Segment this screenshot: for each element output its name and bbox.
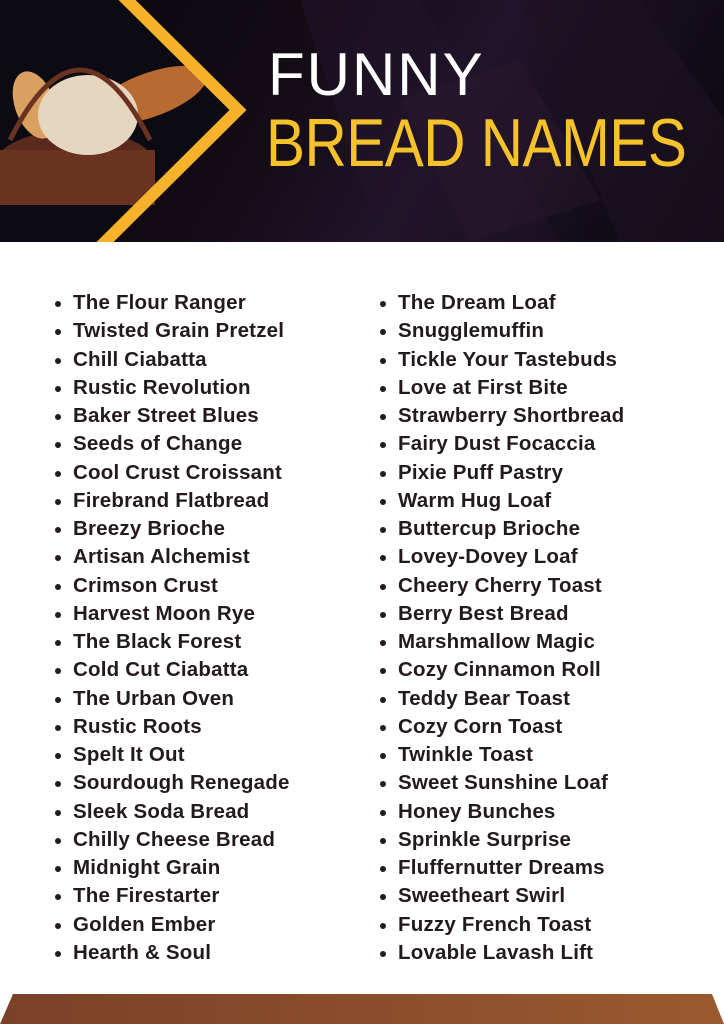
list: right column	[380, 291, 624, 964]
list: right column: Sweet Sunshine Loaf	[398, 771, 608, 794]
list: right column: Cozy Corn Toast	[398, 715, 562, 738]
list: right column: Cozy Cinnamon Roll	[398, 658, 601, 681]
list: left column: Cool Crust Croissant	[73, 460, 282, 484]
yellow chevron	[100, 0, 238, 247]
header banner	[0, 0, 724, 242]
list: right column: Lovable Lavash Lift	[398, 941, 593, 964]
list: left column: Hearth & Soul	[73, 941, 211, 964]
list: right column: Fairy Dust Focaccia	[398, 432, 596, 455]
list: right column: Snugglemuffin	[398, 319, 544, 342]
list: right column: Warm Hug Loaf	[398, 489, 551, 512]
list: right column: Honey Bunches	[398, 800, 556, 822]
title: BREAD NAMES: BREAD NAMES	[266, 106, 686, 181]
list: left column: Harvest Moon Rye	[73, 602, 255, 625]
list: left column: The Urban Oven	[73, 686, 234, 710]
list: left column: Spelt It Out	[73, 743, 185, 766]
list: left column: Firebrand Flatbread	[73, 489, 269, 512]
list: left column: Rustic Roots	[73, 715, 202, 738]
list: right column: Love at First Bite	[398, 376, 568, 399]
list: left column: The Black Forest	[73, 630, 241, 653]
list: right column: Marshmallow Magic	[398, 630, 595, 653]
list: left column: Breezy Brioche	[73, 517, 225, 540]
list: left column	[55, 291, 290, 964]
list: left column: Twisted Grain Pretzel	[73, 319, 284, 342]
list: left column: Crimson Crust	[73, 574, 218, 596]
list: left column: Cold Cut Ciabatta	[73, 658, 248, 681]
list: right column: Fluffernutter Dreams	[398, 856, 605, 879]
list: left column: The Flour Ranger	[73, 291, 246, 314]
list: right column: Twinkle Toast	[398, 743, 533, 766]
list: right column: Sweetheart Swirl	[398, 884, 565, 907]
list: left column: Artisan Alchemist	[73, 545, 250, 568]
list: left column: Golden Ember	[73, 912, 216, 936]
list: left column: Baker Street Blues	[73, 404, 259, 427]
list: left column: Seeds of Change	[73, 432, 242, 455]
list: right column: Fuzzy French Toast	[398, 912, 591, 936]
list: left column: Sourdough Renegade	[73, 771, 290, 794]
list: right column: Berry Best Bread	[398, 602, 569, 625]
list: left column: Rustic Revolution	[73, 376, 251, 399]
title: FUNNY: FUNNY	[268, 41, 485, 108]
list: right column: Strawberry Shortbread	[398, 404, 624, 427]
image: bread basket	[0, 0, 236, 242]
list: left column: Midnight Grain	[73, 856, 220, 879]
list: right column: Teddy Bear Toast	[398, 686, 570, 710]
list: right column: The Dream Loaf	[398, 291, 556, 314]
list: right column: Buttercup Brioche	[398, 517, 580, 540]
list: right column: Cheery Cherry Toast	[398, 574, 602, 596]
list: left column: Chill Ciabatta	[73, 348, 207, 370]
list: left column: The Firestarter	[73, 884, 220, 907]
list: right column: Tickle Your Tastebuds	[398, 348, 617, 370]
list: right column: Sprinkle Surprise	[398, 828, 571, 851]
list: right column: Pixie Puff Pastry	[398, 460, 563, 484]
list: left column: Chilly Cheese Bread	[73, 828, 275, 851]
list: right column: Lovey-Dovey Loaf	[398, 545, 578, 568]
footer bar	[0, 994, 724, 1024]
list: left column: Sleek Soda Bread	[73, 800, 249, 822]
